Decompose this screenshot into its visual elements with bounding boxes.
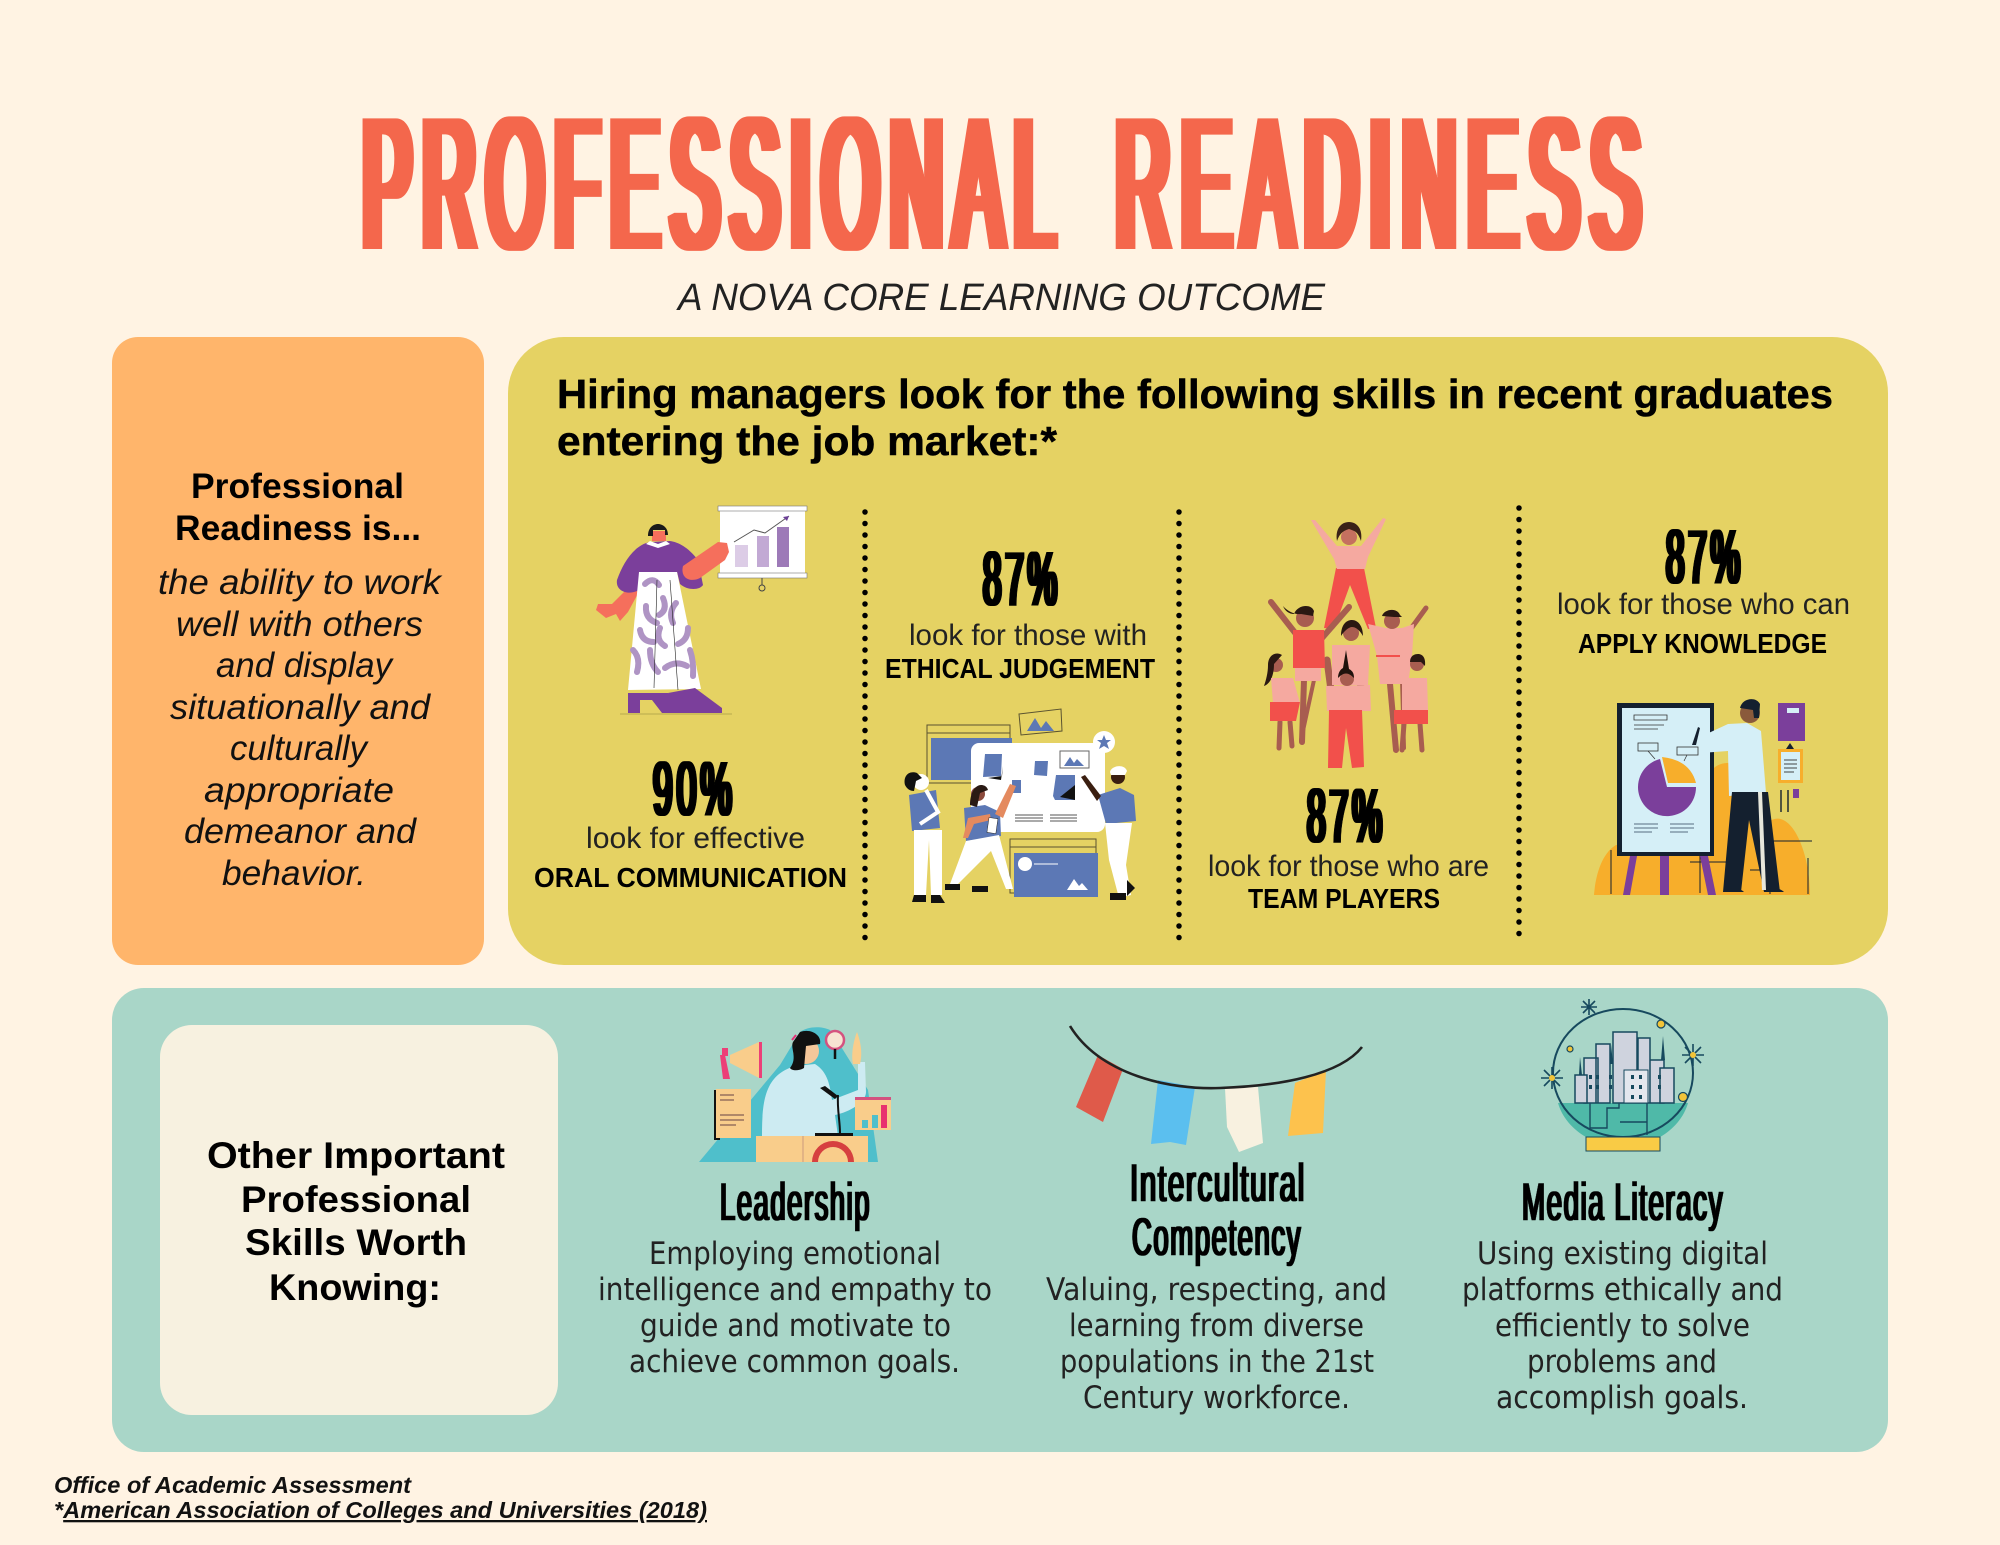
leadership text: guide and motivate to [640, 1308, 951, 1344]
definition text: the ability to work [158, 563, 443, 602]
definition text: culturally [230, 729, 369, 768]
definition heading: Readiness is... [175, 509, 421, 548]
callout: other important skills: Knowing: [269, 1267, 441, 1308]
icon: prayer flag bunting [1070, 1026, 1362, 1152]
leadership text: intelligence and empathy to [598, 1272, 992, 1308]
stat: apply knowledge: look for those who can [1557, 588, 1850, 621]
intercultural competency text: populations in the 21st [1060, 1344, 1374, 1380]
icon: team at idea board [905, 709, 1136, 903]
leadership text [598, 1173, 992, 1380]
definition text: and display [216, 646, 394, 685]
definition heading: Professional [191, 467, 404, 506]
stat: oral communication: 90% [653, 747, 736, 832]
panel: definition [112, 337, 484, 965]
intercultural competency text: Century workforce. [1083, 1380, 1350, 1416]
media literacy text: accomplish goals. [1496, 1380, 1748, 1416]
intercultural competency text [1046, 1154, 1387, 1416]
leadership text: Leadership [720, 1173, 871, 1232]
stat: team players [1208, 774, 1489, 914]
intercultural competency text: learning from diverse [1069, 1308, 1364, 1344]
icon: cheerleader pyramid [1264, 518, 1428, 768]
icon: leadership speaker [699, 1027, 891, 1162]
footer credits: *American Association of Colleges and Universities (2018) [54, 1497, 707, 1523]
leadership text: achieve common goals. [629, 1344, 960, 1380]
panel: hiring manager skills [508, 337, 1888, 965]
footer credits [54, 1472, 707, 1523]
leadership text: Employing emotional [649, 1236, 941, 1272]
callout: other important skills: Other Important [207, 1135, 505, 1176]
icon: presenter with pie chart [1594, 699, 1812, 895]
panel heading: Hiring managers look for the following skills in recent graduates [557, 371, 1833, 417]
stat: oral communication [534, 747, 847, 893]
stat: apply knowledge [1557, 515, 1850, 659]
definition text: behavior. [222, 854, 366, 893]
panel heading [557, 371, 1833, 464]
callout: other important skills: Professional [241, 1179, 471, 1220]
stat: team players: TEAM PLAYERS [1248, 883, 1440, 914]
stat: apply knowledge: 87% [1666, 515, 1744, 600]
media literacy text [1462, 1173, 1783, 1416]
definition text: demeanor and [184, 812, 418, 851]
intercultural competency text: Intercultural [1130, 1154, 1306, 1213]
stat: ethical judgement: look for those with [909, 619, 1147, 652]
stat: apply knowledge: APPLY KNOWLEDGE [1578, 628, 1827, 659]
definition text [158, 563, 443, 893]
stat: oral communication: look for effective [586, 822, 805, 855]
intercultural competency text: Valuing, respecting, and [1046, 1272, 1387, 1308]
stat: ethical judgement [885, 537, 1155, 684]
media literacy text: Using existing digital [1477, 1236, 1768, 1272]
stat: team players: look for those who are [1208, 850, 1489, 883]
subtitle: A NOVA CORE LEARNING OUTCOME [676, 277, 1326, 319]
definition text: situationally and [170, 688, 432, 727]
icon: presenter with chart [596, 506, 807, 714]
definition text: appropriate [204, 771, 394, 810]
panel: other skills [112, 988, 1888, 1452]
icon: city globe [1541, 999, 1704, 1151]
footer credits: Office of Academic Assessment [54, 1472, 412, 1498]
panel heading: entering the job market:* [557, 418, 1057, 464]
media literacy text: problems and [1527, 1344, 1717, 1380]
definition text: well with others [176, 605, 423, 644]
stat: team players: 87% [1307, 774, 1386, 859]
stat: ethical judgement: 87% [983, 537, 1061, 622]
media literacy text: Media Literacy [1522, 1173, 1724, 1232]
media literacy text: platforms ethically and [1462, 1272, 1783, 1308]
stat: ethical judgement: ETHICAL JUDGEMENT [885, 653, 1155, 684]
callout: other important skills [160, 1025, 558, 1415]
intercultural competency text: Competency [1132, 1208, 1302, 1267]
stat: oral communication: ORAL COMMUNICATION [534, 862, 847, 893]
callout: other important skills: Skills Worth [245, 1222, 467, 1263]
media literacy text: efficiently to solve [1495, 1308, 1750, 1344]
definition heading [175, 467, 421, 548]
